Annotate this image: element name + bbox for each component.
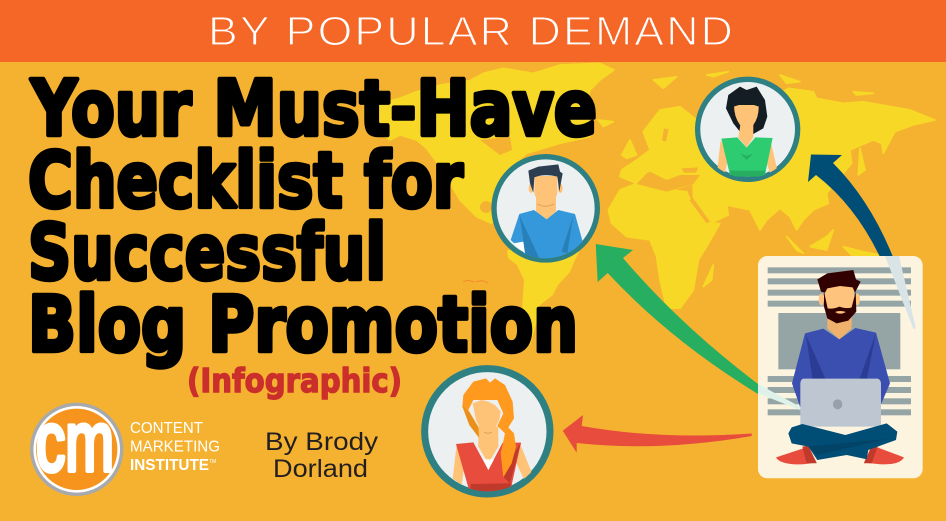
logo badge: cm <box>36 394 114 488</box>
logo wordmark: CONTENT <box>130 420 204 437</box>
logo wordmark <box>130 420 220 474</box>
header banner <box>0 0 946 62</box>
title: Checklist for <box>28 137 463 226</box>
banner text: BY POPULAR DEMAND <box>208 8 735 54</box>
person: man in blue <box>494 157 597 260</box>
logo wordmark: TM <box>209 459 216 465</box>
arrow: blue to top person <box>808 154 893 257</box>
card <box>758 256 923 478</box>
person: woman in red <box>425 369 550 494</box>
byline <box>265 428 379 483</box>
article lines <box>768 267 911 415</box>
arrow: red to woman <box>563 415 752 453</box>
byline: Dorland <box>273 455 368 483</box>
arrow: green to man <box>596 244 758 394</box>
person: woman in green <box>698 79 798 179</box>
blogger figure <box>776 270 904 464</box>
title: Successful <box>28 209 386 298</box>
arrow tail: blue fade <box>885 256 916 329</box>
illustration: blogger on card <box>758 256 923 478</box>
world map <box>370 63 935 345</box>
logo wordmark: MARKETING <box>130 438 220 456</box>
byline: By Brody <box>265 428 379 456</box>
logo: content marketing institute <box>30 394 220 496</box>
subtitle: infographic: (Infographic) <box>187 361 402 400</box>
title: Blog Promotion <box>28 281 578 370</box>
small orange marks <box>463 280 488 283</box>
title <box>28 65 597 370</box>
title: Your Must-Have <box>30 65 597 154</box>
arrow tail: green fade <box>758 384 800 410</box>
logo badge <box>30 394 123 496</box>
logo wordmark: INSTITUTE <box>130 457 209 474</box>
